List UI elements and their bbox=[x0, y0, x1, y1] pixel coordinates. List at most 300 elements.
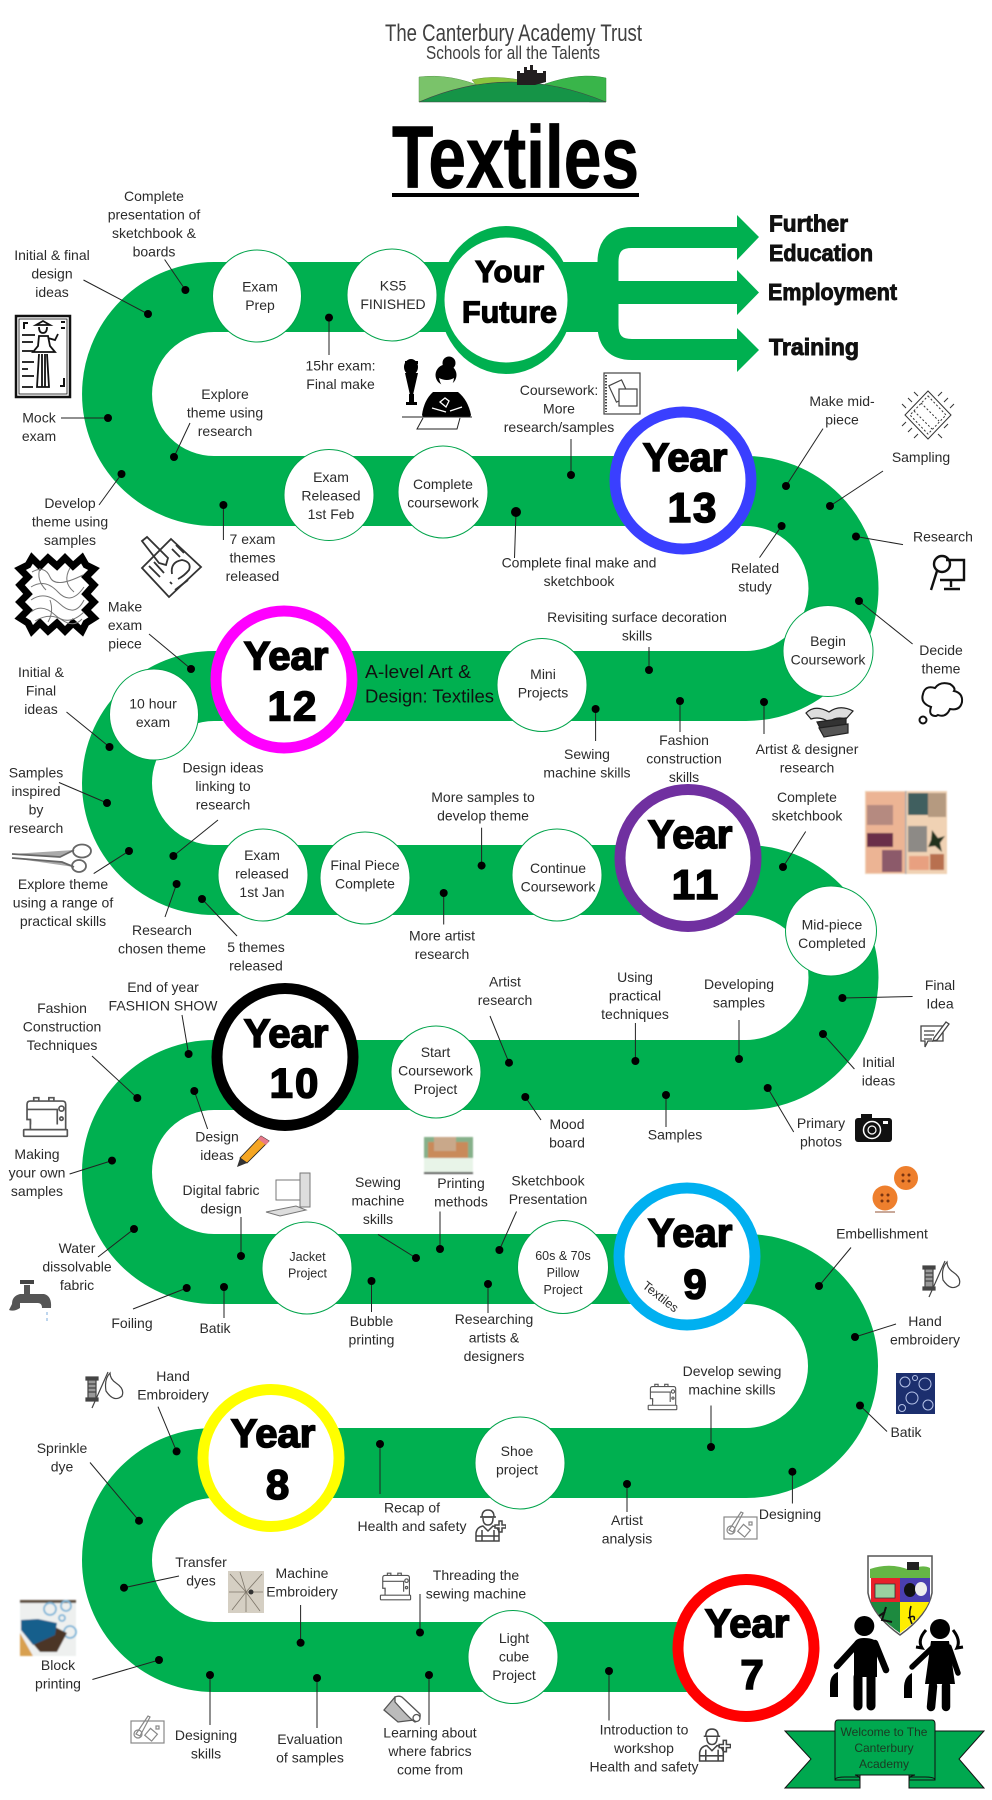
label: Sampling: Sampling bbox=[892, 449, 950, 465]
icon: water tap bbox=[9, 1280, 51, 1324]
road heading: A-level Art and Design: Textiles bbox=[365, 662, 494, 706]
label: Using practical techniques: practical bbox=[609, 988, 661, 1004]
circle text: Light cube Project: Project bbox=[492, 1667, 536, 1683]
label: Initial and final design ideas bbox=[14, 247, 152, 318]
label: Fashion construction skills: construction bbox=[646, 750, 722, 766]
year 12 badge bbox=[216, 611, 352, 748]
circle text: Start Coursework Project: Coursework bbox=[398, 1062, 474, 1078]
label: Sewing machine skills year 9: Sewing bbox=[355, 1174, 401, 1190]
label: Artist research bbox=[478, 974, 532, 1067]
label: Research chosen theme bbox=[118, 880, 206, 956]
label: More artist research bbox=[409, 889, 475, 962]
label: Hand embroidery: embroidery bbox=[890, 1332, 960, 1348]
label: Fashion construction skills: Fashion bbox=[659, 732, 709, 748]
label: Threading the sewing machine: Threading the bbox=[433, 1567, 519, 1583]
year 12 badge: Year bbox=[244, 634, 328, 678]
icon: designing tools bottom bbox=[131, 1716, 164, 1743]
label: Complete sketchbook: Complete bbox=[777, 789, 837, 805]
pathway: Further Education: Education bbox=[769, 240, 873, 266]
label: Recap of Health and safety bbox=[358, 1440, 466, 1534]
label: More samples to develop theme: More samples to bbox=[431, 789, 535, 805]
year 7 badge: 7 bbox=[740, 1651, 766, 1698]
figure: girl with bag bbox=[904, 1619, 963, 1707]
icon: buttons bbox=[872, 1166, 918, 1213]
label: Researching artists and designers bbox=[455, 1280, 533, 1364]
label: Water dissolvable fabric: fabric bbox=[60, 1277, 94, 1293]
label: Related study: Related bbox=[731, 560, 779, 576]
label: Developing samples bbox=[704, 976, 774, 1063]
label: Complete presentation: boards bbox=[133, 244, 175, 260]
label: Fashion Construction Techniques: Techniques bbox=[27, 1037, 97, 1053]
circle text: Light cube Project: cube bbox=[499, 1648, 529, 1664]
label: Hand Embroidery year 8: Embroidery bbox=[137, 1386, 209, 1402]
icon: thought cloud bbox=[920, 683, 962, 724]
icon: sampling swatch bbox=[902, 391, 954, 439]
year 11 badge bbox=[620, 790, 756, 926]
label: Batik right: Batik bbox=[890, 1424, 923, 1440]
label: Introduction to workshop: workshop bbox=[613, 1740, 674, 1756]
label: Research bbox=[852, 528, 973, 545]
circle text: Exam Prep: Prep bbox=[245, 297, 275, 313]
label: Machine Embroidery: Embroidery bbox=[266, 1584, 338, 1600]
label: Coursework more research bbox=[504, 382, 614, 479]
banner: Welcome to The Canterbury Academy bbox=[785, 1720, 984, 1788]
icon: pencil bbox=[237, 1136, 269, 1167]
label: Sewing machine skills year 9: machine bbox=[352, 1192, 405, 1208]
year 13 badge: 13 bbox=[668, 484, 718, 531]
label: Mock exam bbox=[22, 410, 112, 444]
label: Foiling: Foiling bbox=[111, 1315, 153, 1331]
label: Designing skills: skills bbox=[191, 1746, 221, 1762]
year 8 badge: 8 bbox=[266, 1461, 291, 1508]
year 10 badge: Year bbox=[244, 1012, 328, 1056]
label: Make mid-piece: Make mid- bbox=[809, 393, 875, 409]
label: Make exam piece bbox=[108, 598, 195, 673]
label: Bubble printing bbox=[349, 1277, 394, 1348]
label: Transfer dyes bbox=[120, 1554, 227, 1592]
label: Samples inspired by research: inspired bbox=[11, 783, 61, 799]
arrows to future pathways bbox=[600, 215, 759, 372]
year 12 badge: 12 bbox=[268, 682, 318, 730]
label: Design ideas: ideas bbox=[200, 1147, 234, 1163]
label: Evaluation of samples: of samples bbox=[276, 1750, 344, 1766]
banner: Welcome to The Canterbury Academy: Academy bbox=[859, 1757, 909, 1771]
circle text: Exam Prep: Exam bbox=[242, 278, 278, 294]
label: Initial ideas bbox=[819, 1030, 895, 1088]
logo: The Canterbury Academy Trust: Schools for all the Talents bbox=[426, 43, 600, 63]
label: More samples to develop theme: develop theme bbox=[437, 808, 529, 824]
label: Water dissolvable fabric: dissolvable bbox=[42, 1258, 112, 1274]
label: Make exam piece: Make bbox=[108, 598, 142, 614]
label: Samples bbox=[648, 1091, 702, 1143]
label: Sewing machine skills: Sewing bbox=[564, 746, 610, 762]
circle text: 60s and 70s Pillow Project: Pillow bbox=[547, 1266, 580, 1280]
year 13 badge: Year bbox=[643, 436, 727, 480]
label: Initial and final design ideas: ideas bbox=[35, 284, 69, 300]
circle text: Start Coursework Project: Project bbox=[414, 1081, 457, 1097]
label: Explore theme practical skills: Explore theme bbox=[18, 876, 108, 892]
label: Bubble printing: Bubble bbox=[350, 1313, 394, 1329]
circle text: Exam Released 1st Feb: Released bbox=[301, 488, 361, 504]
icon: sewing machine threading bbox=[380, 1573, 411, 1600]
label: Threading the sewing machine bbox=[416, 1567, 526, 1636]
label: Complete sketchbook: sketchbook bbox=[772, 808, 843, 824]
pathway: Training: Training bbox=[769, 334, 859, 360]
your future circle bbox=[439, 226, 573, 374]
label: 15hr exam: 15hr exam: bbox=[305, 358, 376, 374]
label: Printing methods bbox=[434, 1175, 488, 1253]
label: Explore theme practical skills bbox=[13, 847, 133, 929]
label: Decide theme: theme bbox=[922, 660, 961, 676]
label: Digital fabric design bbox=[182, 1182, 260, 1260]
label: Block printing bbox=[35, 1656, 163, 1692]
circle text: Exam released 1st Jan: Exam bbox=[244, 847, 280, 863]
label: Artist analysis: Artist bbox=[611, 1512, 643, 1528]
circle text: Exam Released 1st Feb: 1st Feb bbox=[308, 506, 355, 522]
label: Fashion construction skills bbox=[646, 697, 722, 785]
label: Develop theme using samples: samples bbox=[44, 532, 96, 548]
label: Learning about where fabrics come from bbox=[383, 1671, 477, 1778]
label: Designing: Designing bbox=[759, 1506, 821, 1522]
circle text: 60s and 70s Pillow Project: 60s & 70s bbox=[535, 1249, 591, 1263]
icon: scissors bbox=[12, 844, 91, 872]
label: Coursework more research: More bbox=[543, 400, 575, 416]
image: screen printing photo bbox=[424, 1137, 473, 1174]
label: Artist analysis bbox=[602, 1480, 652, 1546]
label: Block printing: printing bbox=[35, 1676, 81, 1692]
label: Designing skills bbox=[175, 1671, 237, 1762]
label: Artist research: research bbox=[478, 992, 532, 1008]
label: Explore theme practical skills: practical skills bbox=[20, 913, 106, 929]
label: Initial and final design ideas: Initial & final bbox=[14, 247, 90, 263]
label: Block printing: Block bbox=[41, 1657, 76, 1673]
icon: fabric roll bbox=[384, 1696, 420, 1722]
circle text: 10 hour exam: 10 hour bbox=[129, 696, 177, 712]
label: Develop sewing machine skills: Develop sewing bbox=[683, 1363, 781, 1379]
label: Using practical techniques bbox=[601, 969, 669, 1065]
year 10 badge bbox=[217, 988, 353, 1126]
label: Sprinkle dye: dye bbox=[51, 1458, 73, 1474]
label: Digital fabric design: Digital fabric bbox=[182, 1182, 260, 1198]
label: Explore theme practical skills: using a range of bbox=[13, 894, 113, 910]
label: Samples inspired by research: by bbox=[29, 802, 43, 818]
circle text: Shoe project: Shoe bbox=[501, 1443, 534, 1459]
logo: The Canterbury Academy Trust bbox=[385, 20, 642, 102]
label: Fashion Construction Techniques: Fashion bbox=[37, 1000, 87, 1016]
label: Batik: Batik bbox=[199, 1320, 232, 1336]
year 9 badge: 9 bbox=[683, 1261, 709, 1308]
label: Making your own samples: Making bbox=[14, 1146, 60, 1162]
year 8 badge bbox=[203, 1390, 339, 1526]
label: Artist and designer research: research bbox=[780, 760, 834, 776]
label: Artist and designer research: Artist & designer bbox=[756, 741, 859, 757]
road heading: A-level Art and Design: Textiles: Design: Textiles bbox=[365, 686, 494, 706]
circle text: Exam Released 1st Feb: Exam bbox=[313, 469, 349, 485]
year 9 badge bbox=[619, 1188, 755, 1325]
label: Samples inspired by research bbox=[9, 765, 111, 836]
year 13 badge bbox=[615, 412, 751, 549]
year 9 badge: Year bbox=[648, 1212, 732, 1256]
label: More samples to develop theme bbox=[431, 789, 535, 870]
label: Researching artists and designers: designers bbox=[464, 1348, 524, 1364]
label: Related study: study bbox=[738, 578, 772, 594]
icon: desktop computer bbox=[266, 1173, 310, 1216]
label: Sewing machine skills year 9: skills bbox=[363, 1211, 393, 1227]
icon: needle and thread left bbox=[86, 1372, 123, 1408]
label: Sampling bbox=[826, 449, 950, 510]
label: End of year fashion show: End of year bbox=[127, 979, 199, 995]
label: Design ideas linking to research: linking to bbox=[195, 778, 251, 794]
pathway: Employment: Employment bbox=[768, 279, 897, 305]
icon: question document pencil bbox=[142, 537, 201, 597]
label: Fashion construction skills: skills bbox=[669, 769, 699, 785]
label: Final Idea: Idea bbox=[926, 996, 954, 1012]
label: Digital fabric design: design bbox=[200, 1200, 242, 1216]
label: Decide theme: Decide bbox=[919, 642, 963, 658]
label: Develop sewing machine skills: machine skills bbox=[688, 1382, 776, 1398]
year 11 badge: Year bbox=[648, 813, 732, 857]
label: Related study bbox=[731, 522, 786, 594]
label: Mood board bbox=[521, 1093, 585, 1150]
label: Design ideas linking to research: Design ideas bbox=[183, 760, 263, 776]
label: 15hr exam: Final make bbox=[306, 376, 375, 392]
label: Learning about where fabrics come from: come from bbox=[397, 1762, 463, 1778]
icon: designing tools bbox=[724, 1512, 757, 1539]
label: Artist analysis: analysis bbox=[602, 1530, 652, 1546]
circle text: Continue Coursework: Continue bbox=[530, 860, 586, 876]
label: Initial ideas: ideas bbox=[862, 1072, 895, 1088]
label: 7 exam themes released: themes bbox=[230, 550, 275, 566]
label: Hand Embroidery year 8: Hand bbox=[156, 1368, 190, 1384]
icon: topographic fabric swatch bbox=[20, 558, 94, 631]
label: Explore theme using research: theme using bbox=[187, 404, 263, 420]
label: Developing samples: samples bbox=[713, 994, 765, 1010]
circle text: Jacket Project: Jacket bbox=[289, 1250, 326, 1264]
label: Learning about where fabrics come from: Learning about bbox=[383, 1725, 477, 1741]
label: Design ideas bbox=[190, 1087, 239, 1163]
label: Complete presentation: presentation of bbox=[108, 206, 200, 222]
label: Revisiting surface decoration skills bbox=[547, 609, 727, 674]
label: Machine Embroidery bbox=[266, 1565, 338, 1647]
label: Research chosen theme: chosen theme bbox=[118, 940, 206, 956]
label: Developing samples: Developing bbox=[704, 976, 774, 992]
circle text: Start Coursework Project: Start bbox=[421, 1044, 450, 1060]
circle text: Continue Coursework: Coursework bbox=[521, 878, 596, 894]
label: Using practical techniques: techniques bbox=[601, 1006, 669, 1022]
label: Introduction to workshop: Health and safety bbox=[590, 1759, 698, 1775]
label: Complete final make and sketchbook: Complete final make and bbox=[502, 554, 656, 570]
your future circle: Future bbox=[462, 294, 557, 330]
label: Initial and final design ideas: design bbox=[31, 266, 73, 282]
image: block printing photo bbox=[20, 1600, 76, 1656]
label: More artist research: More artist bbox=[409, 928, 475, 944]
label: Mood board: Mood bbox=[549, 1116, 585, 1132]
figure: boy with bag bbox=[830, 1616, 886, 1706]
label: Making your own samples: your own bbox=[9, 1164, 65, 1180]
label: Samples inspired by research: Samples bbox=[9, 765, 63, 781]
label: Machine Embroidery: Machine bbox=[276, 1565, 329, 1581]
label: Sketchbook Presentation: Sketchbook bbox=[511, 1172, 586, 1188]
icon: health and safety worker bottom bbox=[700, 1729, 730, 1761]
label: Evaluation of samples: Evaluation bbox=[277, 1731, 343, 1747]
circle text: Complete coursework: coursework bbox=[407, 494, 480, 510]
label: Transfer dyes: Transfer bbox=[175, 1554, 227, 1570]
image: sketchbook collage bbox=[865, 791, 947, 874]
circle text: Mid-piece Completed: Mid-piece bbox=[802, 916, 863, 932]
school crest bbox=[868, 1556, 932, 1635]
label: Water dissolvable fabric: Water bbox=[59, 1240, 96, 1256]
label: Complete presentation bbox=[108, 188, 200, 294]
year 10 badge: 10 bbox=[270, 1060, 320, 1106]
label: Complete presentation: sketchbook & bbox=[112, 225, 197, 241]
label: Initial and Final ideas: Final bbox=[26, 682, 56, 698]
circle text: Begin Coursework: Coursework bbox=[791, 652, 866, 668]
label: Develop theme using samples bbox=[32, 470, 126, 548]
label: Samples inspired by research: research bbox=[9, 820, 63, 836]
label: Using practical techniques: Using bbox=[617, 969, 653, 985]
image: machine embroidery sample bbox=[228, 1571, 264, 1613]
label: Research chosen theme: Research bbox=[132, 922, 192, 938]
label: Batik bbox=[199, 1283, 232, 1336]
label: More artist research: research bbox=[415, 946, 469, 962]
milestone circles bbox=[110, 249, 876, 1704]
circle text: Begin Coursework: Begin bbox=[810, 633, 846, 649]
road heading: A-level Art and Design: Textiles: A-level Art & bbox=[365, 662, 471, 682]
label: Make exam piece: exam bbox=[108, 617, 142, 633]
label: Embellishment bbox=[815, 1226, 928, 1290]
label: 5 themes released: 5 themes bbox=[227, 939, 285, 955]
circle text: Mid-piece Completed: Completed bbox=[798, 935, 866, 951]
label: Explore theme using research bbox=[170, 386, 263, 461]
year 7 badge bbox=[678, 1580, 814, 1716]
label: Hand Embroidery year 8 bbox=[137, 1368, 209, 1455]
label: Design ideas linking to research bbox=[169, 760, 263, 860]
label: Explore theme using research: Explore bbox=[201, 386, 249, 402]
label: Mood board: board bbox=[549, 1134, 585, 1150]
label: Make mid-piece: piece bbox=[825, 412, 859, 428]
label: 5 themes released bbox=[198, 895, 285, 974]
label: Samples: Samples bbox=[648, 1127, 702, 1143]
label: Printing methods: methods bbox=[434, 1194, 488, 1210]
label: Fashion Construction Techniques bbox=[23, 1000, 141, 1102]
pathway: Further Education: Further bbox=[769, 210, 848, 236]
circle text: Light cube Project: Light bbox=[499, 1630, 529, 1646]
label: Initial ideas: Initial bbox=[862, 1054, 895, 1070]
label: Foiling bbox=[111, 1284, 191, 1331]
label: Water dissolvable fabric bbox=[42, 1225, 138, 1293]
label: Embellishment: Embellishment bbox=[836, 1226, 928, 1242]
label: Revisiting surface decoration skills: skills bbox=[622, 628, 652, 644]
label: Complete final make and sketchbook: sketchbook bbox=[544, 573, 615, 589]
winding green road bbox=[117, 297, 844, 1657]
circle text: KS5 Finished: FINISHED bbox=[360, 296, 426, 312]
label: Hand embroidery bbox=[851, 1313, 960, 1348]
circle text: Jacket Project: Project bbox=[288, 1266, 327, 1280]
circle text: Mini Projects: Mini bbox=[530, 666, 556, 682]
label: Making your own samples bbox=[9, 1146, 116, 1199]
label: Design ideas linking to research: research bbox=[196, 797, 250, 813]
label: Coursework more research: research/samples bbox=[504, 419, 614, 435]
label: Primary photos: photos bbox=[800, 1134, 842, 1150]
label: 7 exam themes released: released bbox=[226, 568, 279, 584]
icon: fashion document bbox=[16, 316, 70, 397]
label: Final Idea bbox=[838, 977, 955, 1012]
label: Design ideas: Design bbox=[195, 1128, 239, 1144]
label: End of year fashion show bbox=[109, 979, 218, 1058]
label: Researching artists and designers: Researching bbox=[455, 1311, 533, 1327]
icon: camera bbox=[855, 1114, 892, 1142]
icon: needle and thread right bbox=[923, 1261, 960, 1297]
label: Introduction to workshop: Introduction to bbox=[600, 1722, 689, 1738]
title: Textiles bbox=[392, 108, 639, 206]
circle text: 10 hour exam: exam bbox=[136, 714, 170, 730]
label: Making your own samples: samples bbox=[11, 1183, 63, 1199]
label: Primary photos: Primary bbox=[797, 1115, 845, 1131]
label: 5 themes released: released bbox=[229, 958, 283, 974]
icon: stack of books bbox=[806, 708, 853, 737]
label: Printing methods: Printing bbox=[437, 1175, 485, 1191]
year 8 badge: Year bbox=[231, 1412, 315, 1456]
label: Complete presentation: Complete bbox=[124, 188, 184, 204]
year 9 badge: Textiles bbox=[640, 1278, 681, 1315]
label: Initial and Final ideas: ideas bbox=[24, 701, 58, 717]
circle text: KS5 Finished: KS5 bbox=[380, 278, 406, 294]
year 7 badge: Year bbox=[705, 1602, 789, 1646]
label: Sewing machine skills year 9 bbox=[352, 1174, 420, 1262]
label: Recap of Health and safety: Health and safety bbox=[358, 1518, 466, 1534]
icon: artboard sketchbook bbox=[604, 373, 640, 414]
label: Fashion Construction Techniques: Construction bbox=[23, 1018, 101, 1034]
label: Sketchbook Presentation bbox=[495, 1172, 587, 1254]
label: Develop theme using samples: theme using bbox=[32, 514, 108, 530]
circle text: Shoe project: project bbox=[496, 1462, 538, 1478]
banner: Welcome to The Canterbury Academy: Canterbury bbox=[854, 1741, 914, 1755]
circle text: Mini Projects: Projects bbox=[518, 684, 568, 700]
label: Transfer dyes: dyes bbox=[186, 1572, 216, 1588]
logo: The Canterbury Academy Trust: The Canterbury Academy Trust bbox=[385, 20, 642, 47]
label: Mock exam: exam bbox=[22, 428, 56, 444]
label: Threading the sewing machine: sewing machine bbox=[426, 1586, 526, 1602]
label: Develop theme using samples: Develop bbox=[44, 495, 96, 511]
icon: sewing machine small bbox=[648, 1384, 677, 1410]
label: Revisiting surface decoration skills: Revisiting surface decoration bbox=[547, 609, 727, 625]
label: Research: Research bbox=[913, 528, 973, 544]
label: Designing skills: Designing bbox=[175, 1727, 237, 1743]
label: Hand embroidery: Hand bbox=[908, 1313, 942, 1329]
label: Coursework more research: Coursework: bbox=[520, 382, 598, 398]
label: 7 exam themes released: 7 exam bbox=[230, 531, 275, 547]
label: Learning about where fabrics come from: where fabrics bbox=[387, 1743, 472, 1759]
label: Designing bbox=[759, 1468, 821, 1522]
label: Sewing machine skills bbox=[543, 705, 631, 780]
circle text: Final Piece Complete: Final Piece bbox=[330, 857, 400, 873]
label: Initial and Final ideas: Initial & bbox=[18, 664, 65, 680]
label: Initial and Final ideas bbox=[18, 664, 114, 751]
pathway: Further Education bbox=[769, 210, 873, 266]
circle text: Exam released 1st Jan: 1st Jan bbox=[239, 884, 285, 900]
icon: seamstress at table bbox=[402, 356, 472, 429]
circle text: Exam released 1st Jan: released bbox=[235, 866, 289, 882]
label: Explore theme using research: research bbox=[198, 423, 252, 439]
label: Artist and designer research bbox=[756, 698, 859, 776]
label: 15hr exam bbox=[305, 314, 376, 392]
label: Sprinkle dye bbox=[37, 1440, 143, 1525]
label: End of year fashion show: FASHION SHOW bbox=[109, 998, 218, 1014]
icon: research magnifier computer bbox=[931, 556, 964, 590]
label: Complete sketchbook bbox=[772, 789, 843, 871]
circle text: 60s and 70s Pillow Project: Project bbox=[544, 1283, 583, 1297]
circle text: Complete coursework: Complete bbox=[413, 476, 473, 492]
